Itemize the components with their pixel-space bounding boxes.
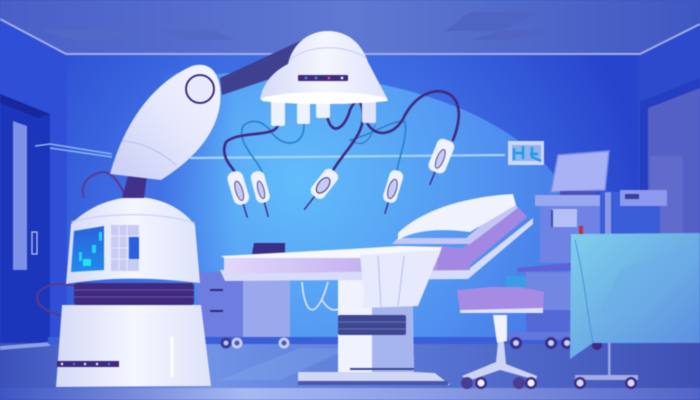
right side wall: [638, 24, 700, 345]
monitor: [551, 151, 609, 195]
pillow: [398, 194, 516, 240]
operating table: [220, 194, 533, 385]
left side wall: [0, 20, 67, 348]
ceiling cornice: [0, 19, 700, 54]
backrest purple side: [437, 208, 527, 270]
instrument 1: [226, 169, 255, 220]
mattress purple: [224, 258, 470, 274]
right cabinet machine: [506, 190, 667, 349]
drape cloth: [360, 250, 441, 308]
white hoses: [302, 282, 340, 310]
back wall: [66, 55, 640, 345]
screen: [71, 226, 104, 272]
base plate: [298, 368, 450, 385]
right door: [640, 78, 700, 345]
surgical instruments: [226, 137, 456, 220]
trolley: [574, 340, 638, 389]
instrument 5: [421, 137, 456, 188]
floor skirting and tiles: [0, 337, 638, 380]
floor: [0, 343, 700, 389]
table top: [221, 246, 442, 258]
wall rail: [35, 144, 505, 158]
stool: [457, 287, 544, 389]
instrument 2: [249, 170, 275, 219]
left cabinet: [198, 272, 290, 348]
robot cables at base: [37, 172, 125, 316]
coil rings: [74, 283, 194, 305]
blue sheet: [570, 226, 700, 359]
surgical arm head: [260, 31, 388, 126]
instrument 4: [378, 169, 405, 216]
robot arm: [110, 65, 220, 180]
cables: [224, 91, 459, 172]
led strip: [57, 361, 119, 367]
upper dome: [66, 197, 200, 284]
pedestal: [338, 280, 414, 372]
robot base: [56, 197, 211, 387]
small device behind table: [252, 243, 285, 254]
keypad panel: [111, 225, 139, 271]
connector arm: [220, 40, 302, 95]
left door: [0, 94, 50, 347]
floor strip: [0, 388, 700, 400]
ceiling: [0, 0, 700, 56]
robot neck: [122, 176, 147, 198]
light glow on wall: [174, 72, 571, 338]
instrument 3: [298, 166, 341, 215]
frame under backrest: [220, 218, 533, 281]
light cylinders: [271, 94, 376, 126]
wall socket panel: [508, 141, 544, 165]
lower body: [56, 305, 211, 387]
